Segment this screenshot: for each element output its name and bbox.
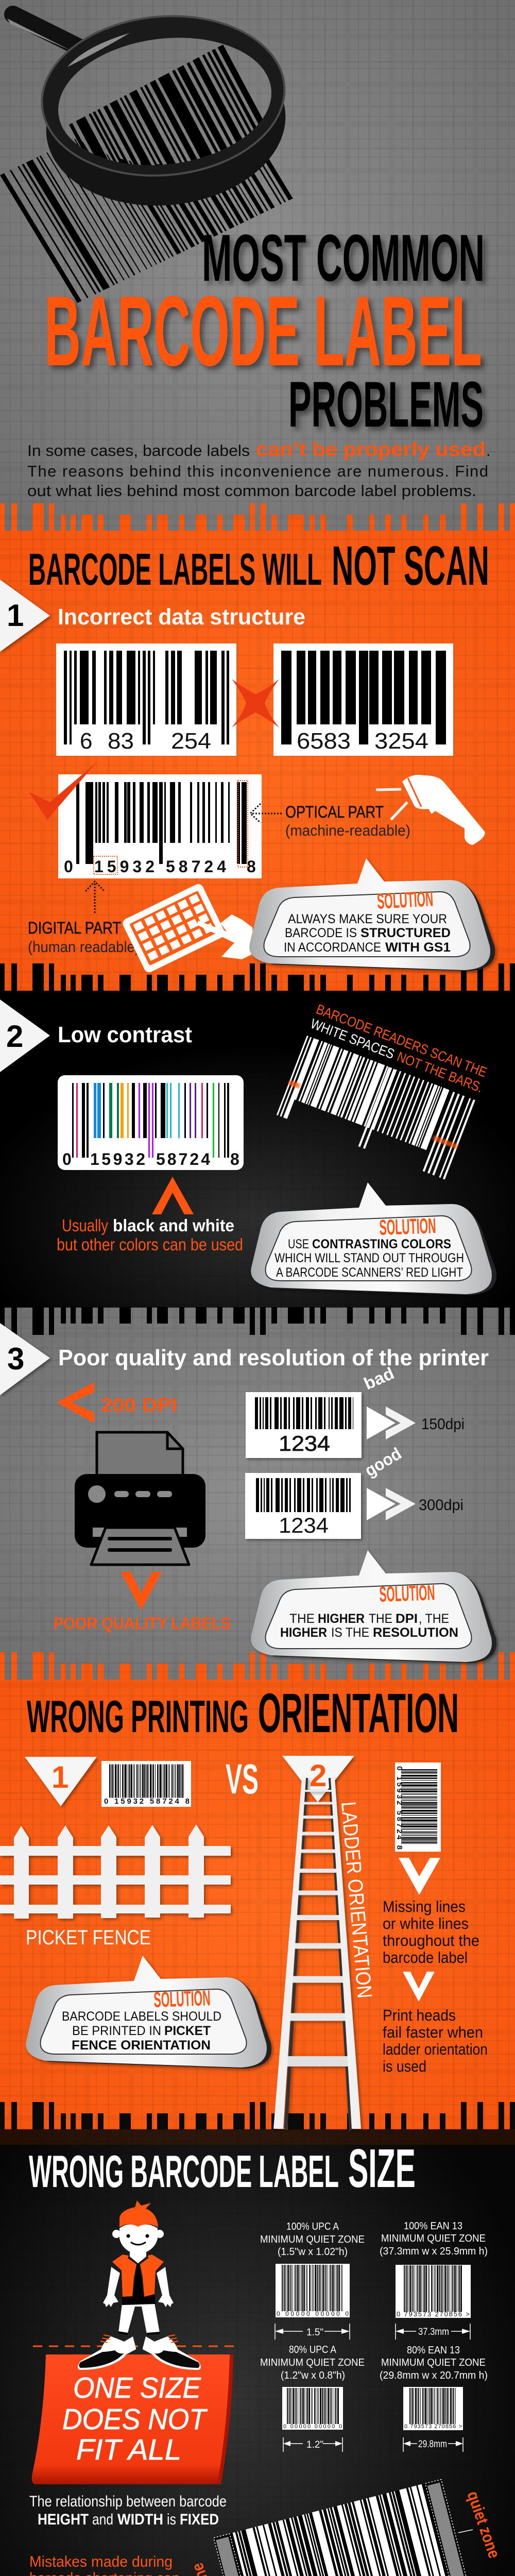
size sample: 80% EAN 13: 0 793573 270856 > bbox=[404, 2424, 462, 2430]
solution callout 4: SOLUTION bbox=[153, 1986, 211, 2012]
size sample: 100% EAN 13: (37.3mm w x 25.9mm h) bbox=[380, 2246, 488, 2257]
arrow: down chevron bbox=[121, 1572, 162, 1610]
barcode: coloured: 0 bbox=[62, 1150, 72, 1168]
barcode: bad quality 150dpi: 1234 bbox=[279, 1431, 330, 1455]
barcode: incorrect B bbox=[273, 643, 453, 756]
text: picket fence: PICKET FENCE bbox=[26, 1926, 151, 1949]
size sample: 100% EAN 13: 37.3mm bbox=[418, 2327, 449, 2337]
arrow: up chevron bbox=[152, 1177, 194, 1214]
icon: magnifying glass bbox=[7, 6, 294, 217]
orientation option 1 badge: 1 bbox=[52, 1760, 68, 1794]
barcode: incorrect A: 83 bbox=[108, 728, 134, 754]
barcode: coloured: 8 bbox=[230, 1150, 239, 1168]
solution callout 3: IS THE bbox=[331, 1625, 369, 1640]
label: digital part with arrow bbox=[28, 882, 140, 956]
barcode: correct: 58724 bbox=[166, 857, 226, 876]
arrow: white chevron 2 bbox=[403, 1972, 435, 2002]
barcode: coloured: 15932 bbox=[90, 1150, 145, 1168]
label: digital part with arrow: DIGITAL PART bbox=[28, 919, 121, 937]
barcode: ladder sample: 0 15932 58724 8 bbox=[395, 1766, 404, 1850]
solution callout 2 bbox=[251, 1182, 496, 1295]
barcode: picket fence sample bbox=[101, 1761, 191, 1807]
barcode: ladder sample bbox=[395, 1762, 441, 1852]
text: relationship fixed: HEIGHT bbox=[38, 2511, 89, 2528]
text: print heads bbox=[383, 2006, 488, 2075]
text: vs: VS bbox=[226, 1756, 259, 1803]
banner: one size does not fit all: ONE SIZE bbox=[73, 2371, 201, 2404]
text: relationship fixed bbox=[29, 2493, 227, 2528]
banner: one size does not fit all bbox=[32, 2346, 240, 2484]
problem 1 number: 1 bbox=[7, 598, 24, 633]
size sample: 100% UPC A: 100% UPC A bbox=[286, 2221, 339, 2232]
size sample: 80% EAN 13: MINIMUM QUIET ZONE bbox=[381, 2357, 486, 2368]
barcode: quiet zones bbox=[214, 2480, 468, 2576]
solution callout 3: , THE bbox=[419, 1612, 449, 1626]
problem 2 number: 2 bbox=[6, 1019, 23, 1054]
text: barcode readers scan the white spaces: NOT THE BARS. bbox=[395, 1049, 485, 1096]
heading: wrong printing orientation: WRONG PRINTING bbox=[27, 1691, 249, 1742]
intro text bbox=[27, 439, 491, 500]
size sample: 80% UPC A: 80% UPC A bbox=[289, 2344, 337, 2355]
barcode: coloured: 58724 bbox=[156, 1150, 210, 1168]
size sample: 80% UPC A bbox=[260, 2344, 365, 2452]
text: mistakes made during shortening bbox=[29, 2553, 195, 2576]
text: usually black and white: Usually bbox=[62, 1216, 108, 1235]
solution callout 3: SOLUTION bbox=[379, 1580, 435, 1606]
text: relationship fixed: is bbox=[167, 2511, 176, 2528]
problem 1 number bbox=[0, 580, 50, 652]
text: missing lines: barcode label bbox=[383, 1948, 468, 1967]
solution callout 1: STRUCTURED bbox=[360, 926, 451, 940]
label: digital part with arrow: (human readable) bbox=[28, 939, 140, 956]
barcode: correct bbox=[58, 774, 262, 878]
solution callout 2: USE bbox=[288, 1237, 309, 1251]
text: relationship fixed: WIDTH bbox=[117, 2511, 163, 2528]
icon: printer bbox=[75, 1432, 205, 1565]
text: usually black and white: black and white bbox=[113, 1216, 234, 1235]
text: 200 dpi: 200 DPI bbox=[101, 1395, 177, 1416]
text: missing lines bbox=[383, 1897, 479, 1967]
problem 2 number bbox=[0, 999, 50, 1072]
barcode: correct: 15932 bbox=[94, 857, 154, 876]
text: barcode readers scan the white spaces: BARCODE READERS SCAN THE bbox=[314, 1002, 489, 1080]
magnified barcode inside lens bbox=[100, 104, 254, 184]
barcode: correct: 8 bbox=[247, 857, 256, 876]
title bbox=[44, 221, 485, 440]
problem 3 number bbox=[0, 1323, 50, 1395]
size sample: 80% UPC A: 1.2" bbox=[306, 2439, 323, 2450]
icon: cartoon boy bbox=[78, 2200, 201, 2370]
solution callout 4: PICKET bbox=[164, 2024, 211, 2038]
banner: one size does not fit all: DOES NOT bbox=[62, 2403, 208, 2436]
text: ladder orientation: LADDER ORIENTATION bbox=[337, 1801, 376, 1999]
intro text: . bbox=[486, 442, 491, 460]
size sample: 100% UPC A: MINIMUM QUIET ZONE bbox=[260, 2234, 365, 2245]
size sample: 100% UPC A: (1.5"w x 1.02"h) bbox=[278, 2246, 348, 2258]
solution callout 1: ALWAYS MAKE SURE YOUR bbox=[288, 912, 447, 926]
barcode: incorrect A: 6 bbox=[80, 728, 92, 754]
barcode: incorrect A bbox=[56, 643, 236, 756]
size sample: 80% EAN 13 bbox=[380, 2345, 488, 2452]
text: print heads: ladder orientation bbox=[383, 2040, 488, 2058]
icon: red cross bbox=[232, 679, 279, 727]
solution callout 4: BARCODE LABELS SHOULD bbox=[62, 2009, 221, 2024]
solution callout 2: WHICH WILL STAND OUT THROUGH bbox=[274, 1251, 464, 1265]
size sample: 100% EAN 13 bbox=[380, 2221, 488, 2340]
text: good: good bbox=[362, 1444, 405, 1480]
arrow: 300dpi bbox=[367, 1488, 416, 1520]
intro text: out what lies behind most common barcode label problems. bbox=[27, 482, 476, 500]
solution callout 2: A BARCODE SCANNERS’ RED LIGHT bbox=[276, 1265, 463, 1280]
solution callout 3: THE bbox=[289, 1612, 315, 1626]
text: mistakes made during shortening: Mistakes made during bbox=[29, 2553, 173, 2570]
solution callout 1: BARCODE IS bbox=[285, 926, 357, 940]
solution callout 4: BE PRINTED IN bbox=[72, 2024, 161, 2038]
text: relationship fixed: FIXED bbox=[180, 2511, 219, 2528]
label: optical part with arrow bbox=[250, 803, 410, 839]
orientation option 2 badge bbox=[282, 1756, 354, 1802]
text: poor quality labels: POOR QUALITY LABELS bbox=[54, 1614, 231, 1633]
text: usually black and white bbox=[57, 1216, 243, 1254]
solution callout 1 bbox=[249, 858, 495, 971]
text: print heads: fail faster when bbox=[383, 2023, 483, 2041]
barcode under magnifier bbox=[39, 134, 254, 239]
heading: wrong barcode label size bbox=[29, 2138, 416, 2199]
size sample: 80% UPC A: 0 00000 00000 0 bbox=[283, 2424, 342, 2430]
size sample: 100% EAN 13: 100% EAN 13 bbox=[404, 2221, 462, 2232]
text: print heads: Print heads bbox=[383, 2006, 456, 2024]
size sample: 80% UPC A: (1.2"w x 0.8"h) bbox=[281, 2370, 345, 2381]
orientation option 1 badge bbox=[25, 1757, 97, 1806]
orientation option 2 badge: 2 bbox=[310, 1758, 327, 1793]
text: 300dpi: 300dpi bbox=[419, 1497, 464, 1514]
size sample: 80% EAN 13: 29.8mm bbox=[418, 2439, 447, 2450]
barcode: correct: 0 bbox=[64, 857, 73, 876]
banner: one size does not fit all: FIT ALL bbox=[76, 2433, 181, 2466]
text: usually black and white: but other colors can be used bbox=[57, 1235, 243, 1254]
solution callout 3: RESOLUTION bbox=[373, 1625, 458, 1640]
label: quiet zone right: quiet zone bbox=[464, 2489, 504, 2561]
arrow: white chevron 1 bbox=[399, 1858, 440, 1895]
text: missing lines: or white lines bbox=[383, 1914, 469, 1933]
problem 2 title: Low contrast bbox=[58, 1022, 192, 1047]
barcode: bad quality 150dpi bbox=[246, 1392, 362, 1458]
barcode: incorrect B: 6583 bbox=[297, 728, 351, 754]
icon: picket fence bbox=[0, 1824, 231, 1919]
barcode: scanned by red light bbox=[277, 1036, 475, 1179]
solution callout 1: IN ACCORDANCE bbox=[284, 940, 381, 955]
barcode: incorrect B: 3254 bbox=[374, 728, 428, 754]
icon: ladder bbox=[273, 1778, 361, 2132]
size sample: 80% EAN 13: (29.8mm w x 20.7mm h) bbox=[380, 2370, 488, 2381]
problem 1 title: Incorrect data structure bbox=[58, 604, 305, 630]
text: 150dpi: 150dpi bbox=[421, 1416, 465, 1433]
barcode: incorrect A: 254 bbox=[171, 728, 211, 754]
intro text: The reasons behind this inconvenience are numerous. Find bbox=[27, 462, 488, 480]
text: missing lines: Missing lines bbox=[383, 1897, 466, 1916]
text: relationship fixed: and bbox=[92, 2511, 113, 2528]
solution callout 3: DPI bbox=[396, 1612, 418, 1626]
intro text: In some cases, barcode labels bbox=[27, 442, 250, 460]
solution callout 3: THE bbox=[369, 1612, 392, 1626]
barcode: good quality 300dpi: 1234 bbox=[279, 1513, 329, 1537]
size sample: 100% EAN 13: MINIMUM QUIET ZONE bbox=[381, 2233, 486, 2244]
size sample: 100% EAN 13: 0 793573 270856 > bbox=[397, 2310, 470, 2318]
intro text: can’t be properly used bbox=[256, 439, 486, 461]
solution callout 3: HIGHER bbox=[318, 1612, 365, 1626]
arrow: 150dpi bbox=[367, 1406, 416, 1439]
text: bad: bad bbox=[361, 1363, 397, 1393]
icon: check mark bbox=[29, 762, 97, 820]
solution callout 1: SOLUTION bbox=[376, 886, 434, 913]
text: relationship fixed: The relationship between barcode bbox=[29, 2493, 227, 2510]
solution callout 2: CONTRASTING COLORS bbox=[312, 1237, 451, 1251]
label: optical part with arrow: OPTICAL PART bbox=[285, 803, 384, 821]
problem 3 title: Poor quality and resolution of the printer bbox=[58, 1345, 489, 1370]
problem 3 number: 3 bbox=[7, 1342, 24, 1376]
text: print heads: is used bbox=[383, 2057, 426, 2075]
solution callout 4: FENCE ORIENTATION bbox=[72, 2038, 211, 2053]
solution callout 2: SOLUTION bbox=[379, 1213, 436, 1240]
barcode: coloured bbox=[58, 1075, 244, 1170]
icon: tablet and hand bbox=[121, 883, 254, 974]
size sample: 100% UPC A: 1.5" bbox=[306, 2327, 323, 2338]
text: barcode readers scan the white spaces: WHITE SPACES bbox=[308, 1016, 397, 1062]
barcode: good quality 300dpi bbox=[245, 1473, 361, 1539]
solution callout 1: WITH GS1 bbox=[385, 940, 451, 955]
solution callout 4 bbox=[26, 1956, 271, 2069]
solution callout 3 bbox=[251, 1550, 496, 1663]
size sample: 100% UPC A: 0 00000 00000 0 bbox=[277, 2310, 349, 2317]
label: optical part with arrow: (machine-readable) bbox=[285, 822, 410, 839]
heading: wrong barcode label size: SIZE bbox=[348, 2138, 416, 2199]
barcode: picket fence sample: 0 15932 58724 8 bbox=[104, 1797, 190, 1806]
text: missing lines: throughout the bbox=[383, 1931, 479, 1950]
size sample: 100% UPC A bbox=[260, 2221, 365, 2340]
icon: barcode scanner bbox=[376, 775, 485, 845]
size sample: 80% UPC A: MINIMUM QUIET ZONE bbox=[260, 2357, 365, 2368]
arrow: left chevron bbox=[57, 1382, 94, 1423]
solution callout 3: HIGHER bbox=[280, 1625, 327, 1640]
size sample: 80% EAN 13: 80% EAN 13 bbox=[407, 2345, 460, 2356]
